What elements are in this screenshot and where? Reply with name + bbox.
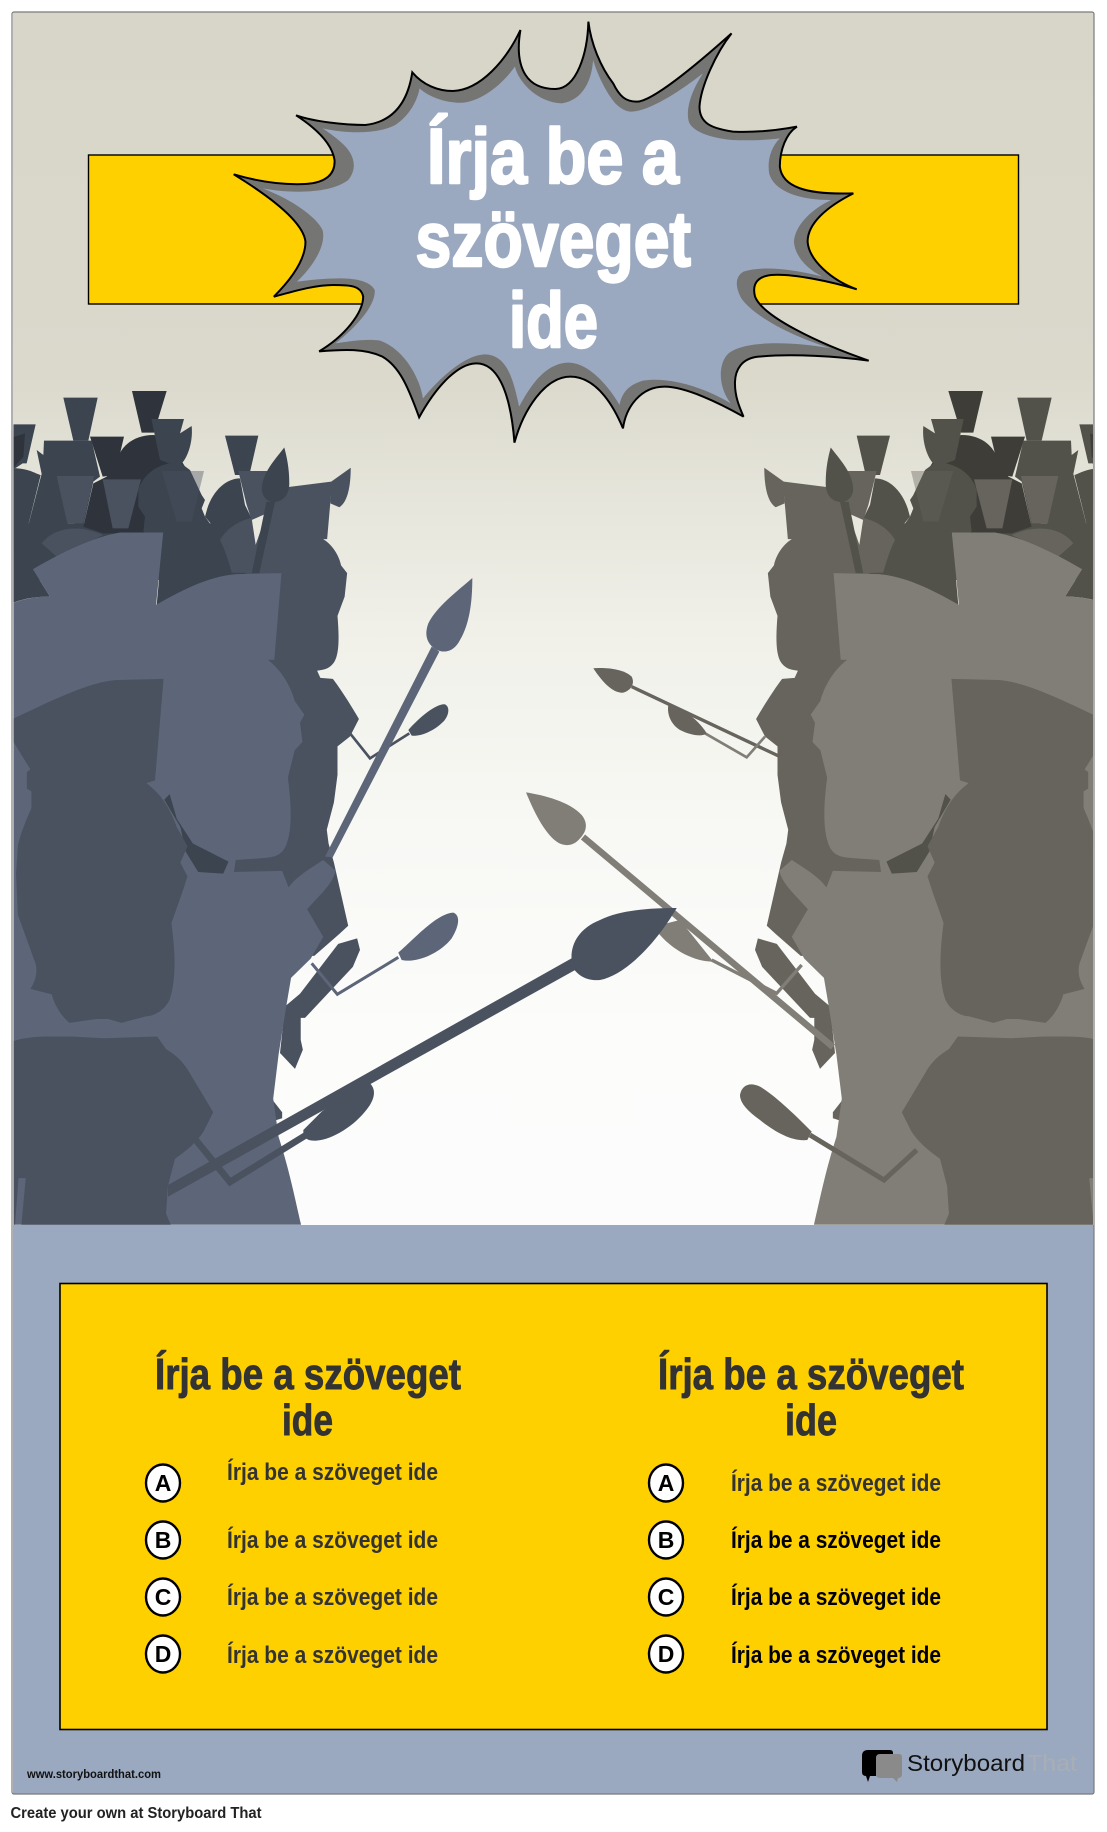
spear: long upper left — [325, 578, 472, 857]
scene: armies and spears — [7, 391, 1107, 1225]
option A right: Írja be a szöveget ide — [731, 1469, 941, 1497]
option B left — [146, 1522, 438, 1558]
option B right — [649, 1522, 941, 1558]
options: left column — [146, 1458, 438, 1672]
title: Írja be a — [427, 112, 680, 200]
heading: left column — [155, 1349, 461, 1445]
starburst: title shape — [234, 22, 869, 443]
option D left: Írja be a szöveget ide — [227, 1641, 438, 1669]
option B left: B — [155, 1527, 171, 1553]
options: right column — [649, 1464, 941, 1672]
army: left blue soldiers — [7, 391, 360, 1225]
heading: right column — [658, 1349, 964, 1445]
option C left — [146, 1578, 438, 1616]
option D right: D — [658, 1641, 674, 1667]
title banner: yellow bar — [88, 155, 1018, 304]
spear: lower right arm — [740, 1084, 917, 1180]
option C right: Írja be a szöveget ide — [731, 1583, 941, 1611]
panel: bottom blue band — [13, 1225, 1094, 1794]
option A right: A — [658, 1470, 674, 1496]
option D left: D — [155, 1641, 171, 1667]
option A left: A — [155, 1470, 171, 1496]
spear: mid blade — [312, 913, 458, 994]
option C left: Írja be a szöveget ide — [227, 1583, 438, 1611]
army: right grey soldiers — [755, 391, 1107, 1225]
spear: upper right with small blade — [526, 668, 780, 845]
option C right: C — [658, 1584, 674, 1610]
option A left: Írja be a szöveget ide — [227, 1458, 438, 1486]
panel: battle scene background — [13, 12, 1094, 1225]
spear: lower large arm — [195, 1083, 374, 1182]
credit line: Create your own at Storyboard That — [10, 1805, 262, 1822]
spear: long right spear — [583, 837, 833, 1047]
option B right: Írja be a szöveget ide — [731, 1526, 941, 1554]
option C left: C — [155, 1584, 171, 1610]
heading: left column: Írja be a szöveget — [155, 1349, 461, 1399]
logo: Storyboard That: Storyboard — [907, 1750, 1025, 1776]
option B left: Írja be a szöveget ide — [227, 1526, 438, 1554]
spear: big foreground spear — [168, 908, 677, 1197]
panel: yellow quiz box — [60, 1284, 1047, 1730]
title — [416, 112, 691, 364]
option A left — [146, 1458, 438, 1502]
heading: right column: Írja be a szöveget — [658, 1349, 964, 1399]
option C right — [649, 1578, 941, 1616]
footer url: www.storyboardthat.com — [26, 1767, 161, 1781]
option B right: B — [658, 1527, 674, 1553]
option A right — [649, 1464, 941, 1502]
heading: left column: ide — [282, 1396, 333, 1445]
option D right — [649, 1636, 941, 1672]
option D right: Írja be a szöveget ide — [731, 1641, 941, 1669]
title: ide — [509, 276, 598, 364]
title: szöveget — [416, 195, 691, 283]
logo: Storyboard That — [862, 1750, 1078, 1782]
heading: right column: ide — [785, 1396, 837, 1445]
option D left — [146, 1636, 438, 1672]
logo: Storyboard That: That — [1027, 1750, 1078, 1776]
